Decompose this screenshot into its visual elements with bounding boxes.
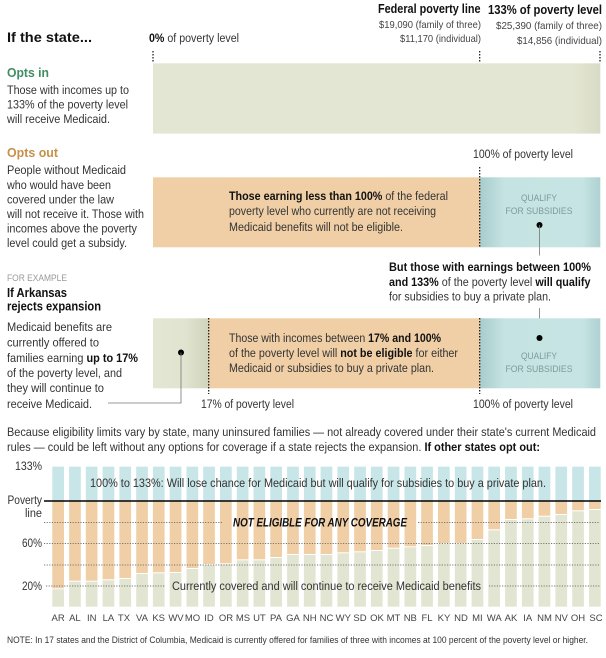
y axis labels bbox=[8, 461, 42, 593]
state labels: SC bbox=[589, 613, 603, 624]
state labels: AK bbox=[505, 613, 518, 624]
label: federal poverty line: Federal poverty line bbox=[378, 1, 480, 16]
text block: for example, Arkansas: receive Medicaid. bbox=[7, 397, 92, 411]
text block: for example, Arkansas: FOR EXAMPLE bbox=[7, 273, 67, 283]
panel: Arkansas bar bbox=[153, 318, 600, 394]
text block: intro to state chart bbox=[7, 425, 596, 454]
label: 133% of poverty level bbox=[488, 2, 602, 62]
label: 0% of poverty level bbox=[149, 31, 239, 62]
state labels: VA bbox=[136, 613, 149, 624]
state labels: SD bbox=[353, 613, 367, 624]
text block: opts out: Opts out bbox=[7, 145, 59, 160]
text block: opts in bbox=[6, 65, 129, 126]
annotation: currently covered: Currently covered and will continue to receive Medicaid benefits bbox=[172, 579, 481, 593]
label: federal poverty line: $11,170 (individual) bbox=[400, 33, 481, 45]
label: qualify for subsidies, Arkansas: QUALIFY bbox=[521, 351, 558, 362]
state labels: GA bbox=[286, 613, 301, 624]
state labels: OH bbox=[571, 613, 585, 624]
callout: earnings between 100% and 133%: and 133% of the poverty level will qualify bbox=[389, 275, 591, 289]
state labels: ND bbox=[454, 613, 468, 624]
text: not eligible 17% to 100%: Those with incomes between 17% and 100% bbox=[229, 331, 441, 345]
state labels: WV bbox=[168, 613, 184, 624]
state labels: IA bbox=[523, 613, 533, 624]
text: not eligible 17% to 100% bbox=[229, 331, 458, 375]
state labels: MT bbox=[387, 613, 401, 624]
state labels: KY bbox=[438, 613, 451, 624]
state labels: NH bbox=[303, 613, 317, 624]
text block: opts out: level could get a subsidy. bbox=[7, 236, 127, 250]
text block: opts in: Those with incomes up to bbox=[7, 83, 129, 97]
chart bars bbox=[52, 467, 601, 607]
text block: for example, Arkansas: rejects expansion bbox=[7, 298, 101, 314]
y axis labels: line bbox=[25, 508, 42, 520]
state labels: KS bbox=[152, 613, 165, 624]
heading: if the state: If the state... bbox=[7, 29, 92, 45]
panel: opts out bar bbox=[153, 167, 600, 248]
label: qualify for subsidies, Arkansas bbox=[506, 351, 572, 375]
text block: for example, Arkansas bbox=[7, 273, 138, 411]
label: federal poverty line: $19,090 (family of three) bbox=[379, 19, 481, 31]
callout arrow: receive Medicaid leader bbox=[108, 350, 184, 403]
text block: intro to state chart: rules — could be left without any options for coverage if a state rejects the expansion. If other states opt out: bbox=[7, 440, 540, 454]
text block: opts in: 133% of the poverty level bbox=[7, 98, 128, 112]
state labels: MO bbox=[185, 613, 200, 624]
state labels bbox=[51, 613, 603, 624]
text block: opts out: covered under the law bbox=[7, 192, 114, 206]
text block: for example, Arkansas: currently offered to bbox=[7, 336, 99, 350]
text block: opts out: will not receive it. Those with bbox=[6, 207, 144, 221]
y axis labels: 20% bbox=[22, 581, 42, 593]
state labels: IN bbox=[87, 613, 97, 624]
text: not eligible 17% to 100%: Medicaid or subsidies to buy a private plan. bbox=[229, 361, 434, 375]
label: qualify for subsidies: QUALIFY bbox=[521, 193, 558, 204]
state labels: MS bbox=[236, 613, 250, 624]
state labels: WY bbox=[336, 613, 352, 624]
state labels: NB bbox=[404, 613, 417, 624]
state labels: FL bbox=[421, 613, 433, 624]
label: 100% of poverty level, opts out: 100% of poverty level bbox=[473, 149, 573, 161]
state labels: UT bbox=[253, 613, 266, 624]
state labels: OK bbox=[370, 613, 385, 624]
text: not eligible below 100%: Those earning less than 100% of the federal bbox=[229, 189, 448, 203]
state labels: PA bbox=[270, 613, 283, 624]
callout: earnings between 100% and 133% bbox=[389, 222, 591, 338]
text block: opts in: Opts in bbox=[7, 65, 49, 80]
y axis labels: Poverty bbox=[8, 495, 42, 507]
state labels: WA bbox=[487, 613, 502, 624]
label: qualify for subsidies, Arkansas: FOR SUBSIDIES bbox=[506, 364, 572, 375]
label: 17% of poverty level: 17% of poverty level bbox=[201, 399, 294, 411]
text block: for example, Arkansas: they will continue to bbox=[7, 381, 104, 395]
chart: coverage by state bbox=[8, 461, 603, 624]
state labels: MI bbox=[472, 613, 483, 624]
state labels: AL bbox=[69, 613, 81, 624]
text block: opts out: incomes above the poverty bbox=[7, 222, 138, 236]
text block: for example, Arkansas: Medicaid benefits are bbox=[7, 320, 112, 334]
state labels: NC bbox=[320, 613, 333, 624]
state labels: NV bbox=[555, 613, 569, 624]
label: federal poverty line bbox=[378, 1, 481, 62]
state labels: NM bbox=[537, 613, 552, 624]
label: 100% of poverty level, Arkansas: 100% of poverty level bbox=[473, 399, 573, 411]
text block: for example, Arkansas: If Arkansas bbox=[7, 285, 67, 300]
text block: for example, Arkansas: families earning up to 17% bbox=[7, 351, 138, 365]
text block: opts out: who would have been bbox=[6, 178, 111, 192]
text block: for example, Arkansas: of the poverty level, and bbox=[7, 366, 122, 380]
state labels: TX bbox=[118, 613, 131, 624]
y axis labels: 60% bbox=[22, 538, 42, 550]
y axis labels: 133% bbox=[15, 461, 42, 473]
text: not eligible below 100%: poverty level who currently are not receiving bbox=[229, 204, 436, 218]
state labels: LA bbox=[103, 613, 115, 624]
label: qualify for subsidies bbox=[506, 193, 572, 217]
text block: opts in: will receive Medicaid. bbox=[6, 112, 110, 126]
state labels: OR bbox=[219, 613, 233, 624]
state labels: ID bbox=[204, 613, 214, 624]
label: qualify for subsidies: FOR SUBSIDIES bbox=[506, 206, 572, 217]
panel: opts in bar bbox=[153, 63, 600, 134]
annotation: 100% to 133%: 100% to 133%: Will lose chance for Medicaid but will qualify for subsidies to buy a private plan. bbox=[90, 476, 546, 490]
state labels: AR bbox=[51, 613, 65, 624]
label: 0% of poverty level: 0% of poverty level bbox=[149, 31, 239, 45]
text: not eligible below 100% bbox=[229, 189, 448, 234]
text: not eligible below 100%: Medicaid benefits will not be eligible. bbox=[229, 220, 403, 234]
text: not eligible 17% to 100%: of the poverty level will not be eligible for either bbox=[229, 346, 458, 360]
annotation: not eligible: NOT ELIGIBLE FOR ANY COVERAGE bbox=[233, 518, 407, 530]
label: 133% of poverty level: $14,856 (individual) bbox=[517, 35, 602, 47]
callout: earnings between 100% and 133%: for subsidies to buy a private plan. bbox=[389, 290, 551, 304]
text block: opts out bbox=[6, 145, 144, 250]
text block: opts out: People without Medicaid bbox=[7, 163, 126, 177]
